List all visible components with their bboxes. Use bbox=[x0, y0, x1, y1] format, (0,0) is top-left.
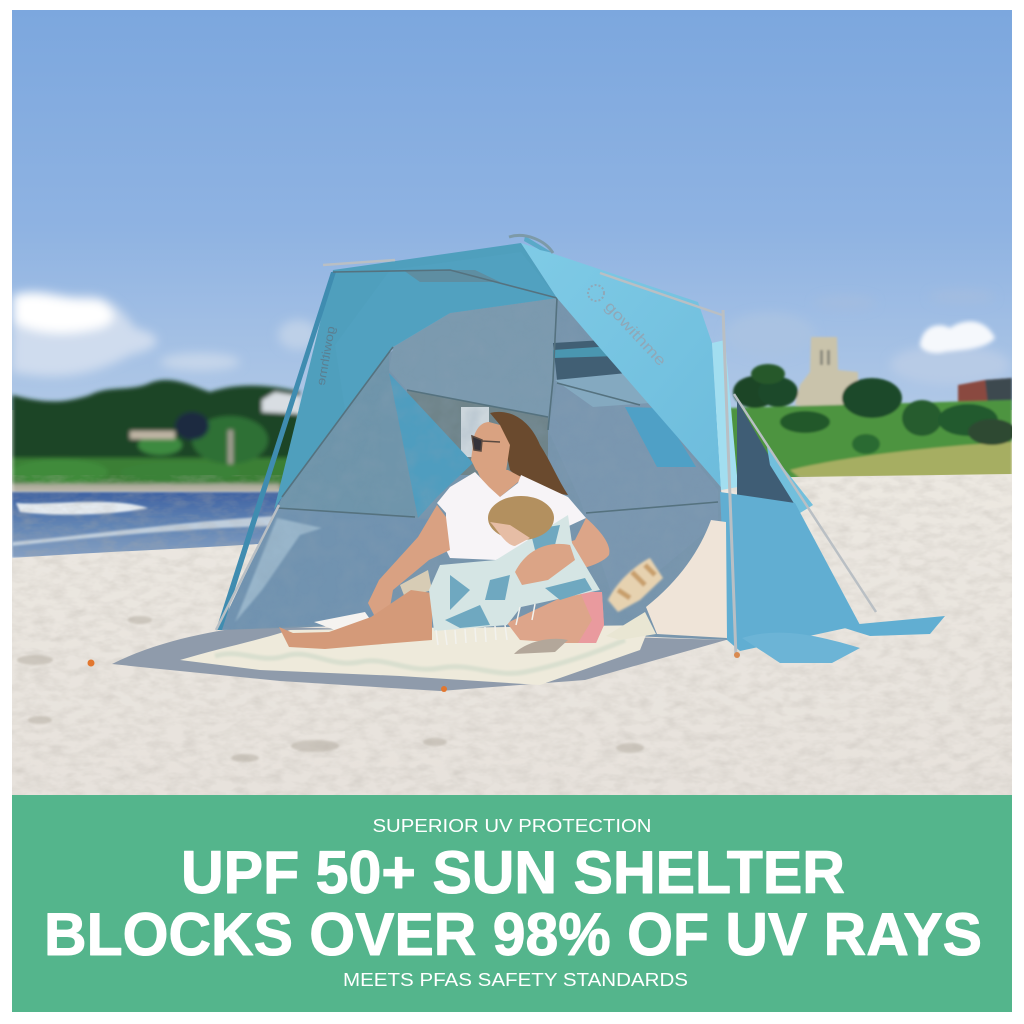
right stripe bbox=[712, 340, 738, 490]
headline line 1: UPF 50+ SUN SHELTER bbox=[181, 839, 845, 906]
child hair bbox=[488, 496, 554, 540]
book on lap bbox=[400, 570, 432, 598]
ground mat bbox=[112, 626, 726, 691]
right ground flaps bbox=[742, 633, 860, 663]
left grey panel bbox=[278, 378, 371, 505]
checker towel bbox=[608, 558, 663, 612]
right light flap bbox=[767, 447, 813, 513]
right hill and church bbox=[730, 337, 1016, 482]
top vent bbox=[524, 237, 551, 252]
hair bbox=[490, 412, 568, 495]
left outer edge bbox=[216, 272, 336, 630]
neck bbox=[476, 468, 523, 497]
subline text: MEETS PFAS SAFETY STANDARDS bbox=[343, 970, 688, 990]
tent bbox=[216, 235, 945, 663]
tent seams bbox=[277, 270, 718, 517]
head bbox=[471, 422, 510, 478]
white towel on lap bbox=[314, 612, 372, 632]
towel fringe bbox=[436, 604, 535, 645]
lower left panel bbox=[222, 544, 260, 630]
photo: beach scene with sun shelter bbox=[12, 10, 1016, 795]
woman hand bbox=[515, 544, 575, 585]
woman and child bbox=[279, 412, 609, 654]
fabric wrinkles bbox=[392, 385, 480, 514]
right dark mesh bbox=[737, 400, 797, 505]
right grey panel bbox=[548, 383, 718, 595]
right arm bbox=[515, 518, 609, 583]
front light band bbox=[521, 243, 721, 487]
cream towel by woman bbox=[606, 612, 656, 640]
waves bbox=[12, 502, 275, 546]
towel pattern bbox=[445, 525, 592, 628]
green caption banner bbox=[12, 795, 1012, 1012]
teal door flap bbox=[389, 373, 473, 518]
patterned towel bbox=[429, 515, 600, 631]
blanket bbox=[180, 625, 650, 685]
mirrored logo on left panel: gowithme bbox=[314, 325, 338, 387]
ceiling seam strip bbox=[403, 270, 500, 282]
tent back wall bbox=[221, 298, 727, 640]
woman leg bbox=[279, 590, 432, 649]
orange pegs bbox=[88, 660, 447, 692]
left arm bbox=[368, 505, 450, 617]
child foot bbox=[514, 639, 568, 654]
sky bbox=[12, 10, 1012, 410]
orange peg bbox=[734, 652, 740, 658]
sand marks bbox=[17, 616, 644, 762]
left treeline bbox=[12, 380, 300, 493]
house seen through opening bbox=[461, 407, 489, 457]
white shirt bbox=[437, 472, 586, 560]
sunglasses bbox=[472, 436, 500, 451]
child leg and shorts bbox=[507, 593, 604, 643]
child face bbox=[490, 522, 530, 546]
upper grey panel bbox=[392, 314, 448, 351]
sand texture bbox=[12, 475, 1012, 795]
right mesh window bbox=[553, 340, 622, 380]
beach sand bbox=[12, 474, 1012, 795]
light reflection lower left bbox=[235, 518, 322, 622]
poles and guy line bbox=[216, 235, 876, 657]
lower right panel bbox=[720, 492, 860, 651]
back opening bbox=[407, 390, 548, 475]
logo sun bbox=[588, 285, 604, 301]
headline line 2: BLOCKS OVER 98% OF UV RAYS bbox=[44, 901, 982, 968]
teal side window bbox=[625, 407, 696, 467]
water bbox=[12, 492, 284, 558]
eyebrow text: SUPERIOR UV PROTECTION bbox=[372, 816, 652, 836]
teal ceiling panel bbox=[274, 243, 557, 510]
clouds bbox=[12, 290, 1010, 385]
tent logo: gowithme bbox=[601, 298, 669, 370]
beige bag bbox=[646, 520, 727, 638]
